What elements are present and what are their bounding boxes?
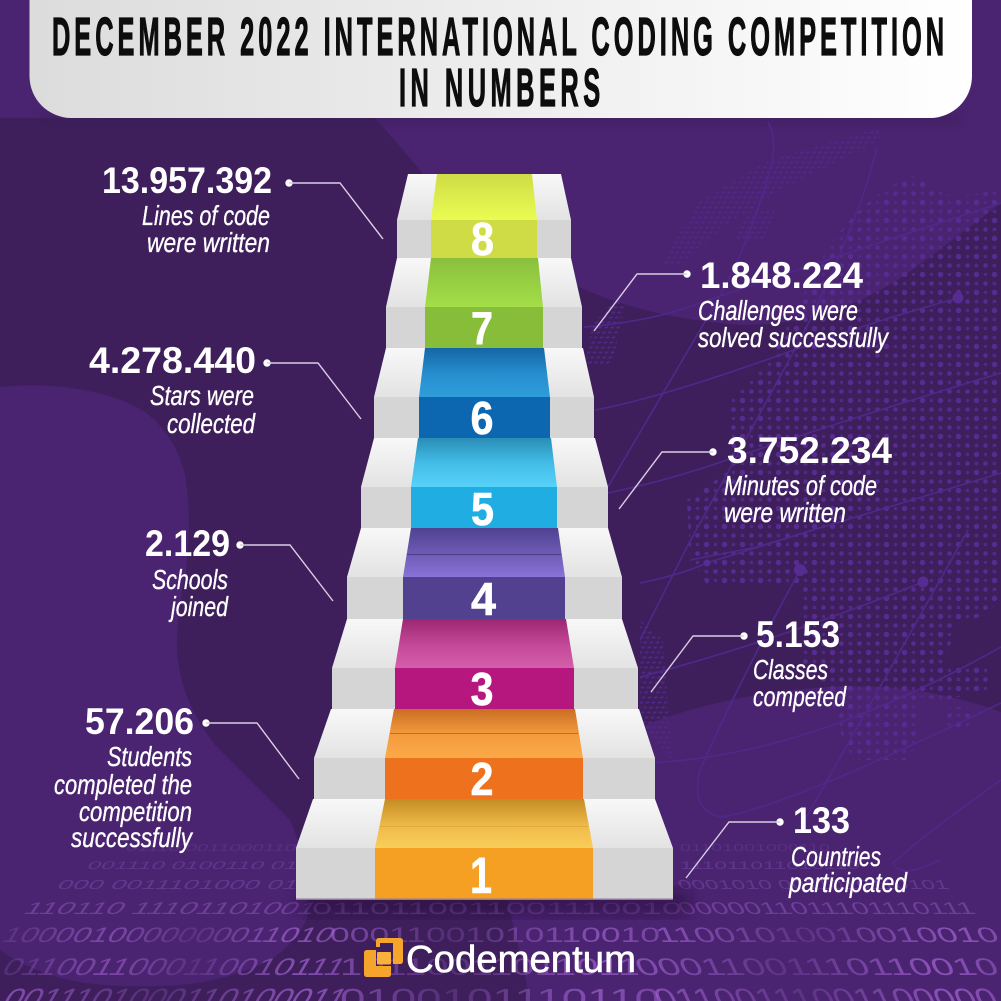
callout: students: successfully bbox=[71, 822, 194, 853]
step 8: 8 bbox=[471, 213, 494, 265]
background: binary code rows: 00011001110110010 bbox=[630, 954, 1001, 981]
background: binary code rows: 0000011011101110111 bbox=[674, 899, 979, 918]
callout: countries: participated bbox=[788, 867, 908, 898]
title panel bbox=[30, 0, 972, 118]
step 8 bbox=[397, 174, 571, 265]
step 3 bbox=[332, 619, 638, 715]
background: world map dots bbox=[585, 128, 1001, 760]
background: binary code rows: 0110011000110010111 bbox=[0, 955, 352, 981]
background: globe lines bbox=[584, 122, 1001, 871]
callout: students: competition bbox=[79, 796, 192, 827]
callout: classes bbox=[651, 614, 847, 712]
callout: stars: collected bbox=[167, 408, 256, 439]
callout: schools: 2.129 bbox=[145, 523, 230, 564]
background: upper lighter shape bbox=[0, 0, 1001, 325]
callout: lines of code bbox=[102, 160, 383, 258]
background: binary code rows: 00011001010110010 bbox=[330, 924, 660, 947]
step 6 bbox=[374, 348, 594, 444]
callout: stars: Stars were bbox=[150, 380, 254, 411]
callout: students: 57.206 bbox=[85, 701, 194, 742]
callout: minutes: Minutes of code bbox=[724, 470, 877, 501]
background: left blob bbox=[0, 385, 308, 986]
callout: countries: 133 bbox=[793, 800, 850, 841]
step 6: 6 bbox=[470, 392, 494, 444]
step 4 bbox=[347, 528, 622, 625]
background: binary code rows: 0001010 0011010110101 bbox=[675, 877, 951, 892]
staircase bbox=[296, 174, 673, 904]
callout: challenges bbox=[594, 255, 890, 353]
callout: challenges: Challenges were bbox=[698, 295, 858, 326]
callout: lines of code: were written bbox=[147, 227, 270, 258]
callout: students: Students bbox=[107, 741, 192, 772]
step 1 bbox=[296, 799, 673, 904]
step 4: 4 bbox=[471, 573, 496, 625]
background: binary code rows: 001110 0100110 01 bbox=[84, 859, 303, 872]
callout: minutes: were written bbox=[724, 497, 846, 528]
callout: countries: Countries bbox=[791, 841, 881, 872]
callout: lines of code: Lines of code bbox=[142, 200, 270, 231]
callout: students bbox=[54, 701, 299, 853]
step 1: 1 bbox=[470, 847, 492, 904]
callout: minutes bbox=[619, 430, 892, 528]
step 3: 3 bbox=[470, 663, 494, 715]
callout: stars: 4.278.440 bbox=[89, 340, 256, 381]
background: binary code rows bbox=[0, 843, 1001, 1001]
callout: schools: joined bbox=[168, 591, 229, 622]
background: binary code rows: 110110 11101101001 bbox=[19, 900, 322, 918]
background: binary code rows: 111011011010110 bbox=[680, 860, 860, 872]
callout: challenges: 1.848.224 bbox=[700, 255, 863, 296]
background: binary code rows: 01101001000110 bbox=[680, 843, 831, 854]
title: DECEMBER 2022 INTERNATIONAL CODING COMPETITION bbox=[52, 6, 944, 67]
step 7 bbox=[386, 258, 582, 354]
callout: schools: Schools bbox=[152, 564, 228, 595]
step 7: 7 bbox=[471, 302, 493, 354]
background: binary code rows: 0110110011001110010 bbox=[312, 899, 682, 918]
background: binary code rows: 10110011011011 bbox=[340, 954, 640, 981]
step 5 bbox=[361, 438, 608, 535]
callout: countries bbox=[686, 800, 908, 898]
background: shadow below title bbox=[40, 114, 960, 124]
background: lower right lighter shape bbox=[500, 686, 1001, 1001]
callout: schools bbox=[145, 523, 333, 622]
callout: classes: 5.153 bbox=[756, 614, 840, 655]
step 5: 5 bbox=[471, 483, 494, 535]
title: IN NUMBERS bbox=[399, 57, 600, 118]
step 2: 2 bbox=[470, 753, 494, 805]
callout: classes: competed bbox=[753, 681, 847, 712]
callout: challenges: solved successfully bbox=[698, 322, 890, 353]
callout: students: completed the bbox=[54, 769, 192, 800]
callout: stars bbox=[89, 340, 361, 439]
title bbox=[52, 6, 944, 118]
background: binary code rows: 1000010000000011010 bbox=[0, 923, 341, 947]
icon: overlapping squares bbox=[364, 938, 403, 977]
callout: minutes: 3.752.234 bbox=[727, 430, 892, 471]
background: binary code rows: 000 0011101000 01 bbox=[54, 877, 303, 892]
callout: lines of code: 13.957.392 bbox=[102, 160, 272, 201]
background: binary code rows: 01110 0011000110 bbox=[124, 843, 299, 854]
stair shadow bbox=[300, 890, 690, 915]
callout: classes: Classes bbox=[753, 654, 828, 685]
step 2 bbox=[314, 709, 655, 805]
logo: Codementum: Codementum bbox=[406, 939, 636, 981]
background: binary code rows: 11001010010010010 bbox=[651, 923, 1001, 947]
